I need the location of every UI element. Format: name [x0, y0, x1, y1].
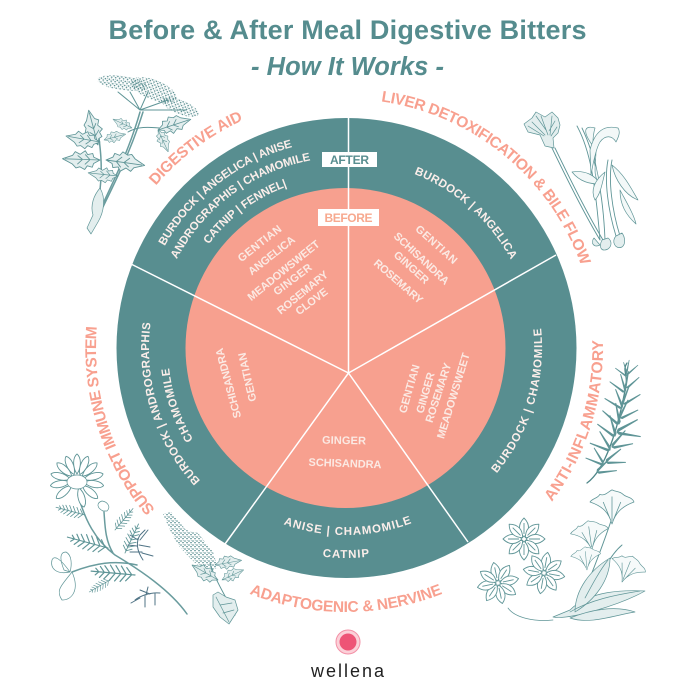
icon: chamomile — [50, 454, 187, 614]
label: anti-inflammatory: ANTI-INFLAMMATORY — [546, 340, 604, 502]
after herbs: digestive aid: BURDOCK | ANGELICA | ANISE — [158, 140, 292, 246]
before herbs: immune: GENTIAN — [237, 351, 259, 403]
icon: catmint spike — [163, 512, 246, 624]
before herbs: digestive aid: MEADOWSWEET — [246, 238, 323, 304]
before herbs: digestive aid: CLOVE — [294, 286, 330, 318]
after ring — [116, 118, 576, 578]
subtitle: - How It Works - — [251, 53, 444, 81]
before herbs: digestive aid: ROSEMARY — [275, 268, 331, 317]
before herbs: digestive aid: ANGELICA — [246, 234, 298, 278]
before herbs: digestive aid — [236, 223, 331, 318]
icon: angelica plant — [62, 72, 201, 234]
after herbs: immune: BURDOCK | ANDROGRAPHIS — [141, 322, 200, 486]
logo mark — [336, 630, 360, 654]
logo: wellena — [310, 630, 385, 681]
before herbs: anti-inflammatory: MEADOWSWEET — [435, 351, 473, 440]
before herbs: digestive aid: GENTIAN — [236, 223, 284, 265]
before herbs: liver: GINGER — [391, 249, 431, 287]
before herbs: anti-inflammatory: GINGER — [414, 371, 438, 415]
title: Before & After Meal Digestive Bitters — [108, 15, 586, 45]
label: digestive aid: DIGESTIVE AID — [148, 112, 241, 185]
before herbs: liver: SCHISANDRA — [391, 230, 451, 288]
icon: gentian flower — [553, 490, 649, 620]
before herbs: anti-inflammatory: ROSEMARY — [424, 361, 454, 424]
after herbs: liver: BURDOCK | ANGELICA — [414, 166, 516, 260]
before herbs: liver: ROSEMARY — [371, 257, 425, 307]
icon: ginger plant — [524, 112, 638, 250]
before herbs: digestive aid: GINGER — [271, 262, 315, 298]
before herbs: anti-inflammatory: GENTIAN — [397, 363, 423, 415]
after herbs: digestive aid: CATNIP | FENNEL| — [204, 178, 288, 243]
label: immune: SUPPORT IMMUNE SYSTEM — [85, 327, 154, 514]
after herbs: digestive aid: ANDROGRAPHIS | CHAMOMILE — [171, 152, 310, 259]
after herbs: adaptogenic: CATNIP — [323, 549, 368, 558]
before herbs: immune: SCHISANDRA — [214, 347, 244, 419]
before herbs: adaptogenic — [308, 435, 382, 471]
label: liver detoxification: LIVER DETOXIFICATION & BILE FLOW — [382, 91, 592, 263]
after herbs: adaptogenic: ANISE | CHAMOMILE — [284, 516, 412, 537]
before herbs: immune — [214, 347, 259, 419]
before badge: BEFORE — [324, 211, 372, 225]
spokes — [131, 118, 556, 544]
wheel chart — [116, 118, 576, 578]
before badge — [318, 209, 379, 226]
icon: star anise — [473, 518, 568, 620]
before herbs: liver — [371, 223, 459, 307]
before herbs: adaptogenic: GINGER — [322, 435, 366, 447]
after herbs: immune: CHAMOMILE — [161, 368, 192, 442]
before disc — [186, 188, 506, 508]
logo wordmark: wellena — [310, 661, 385, 681]
icon: rosemary — [586, 360, 640, 483]
after badge — [322, 152, 377, 167]
label: adaptogenic: ADAPTOGENIC & NERVINE — [250, 584, 442, 612]
before herbs: liver: GENTIAN — [413, 223, 459, 267]
after herbs: adaptogenic — [284, 516, 412, 558]
before herbs: adaptogenic: SCHISANDRA — [308, 457, 382, 471]
before herbs: anti-inflammatory — [397, 351, 473, 440]
after herbs: anti-inflammatory: BURDOCK | CHAMOMILE — [491, 328, 542, 473]
after badge: AFTER — [330, 153, 369, 167]
